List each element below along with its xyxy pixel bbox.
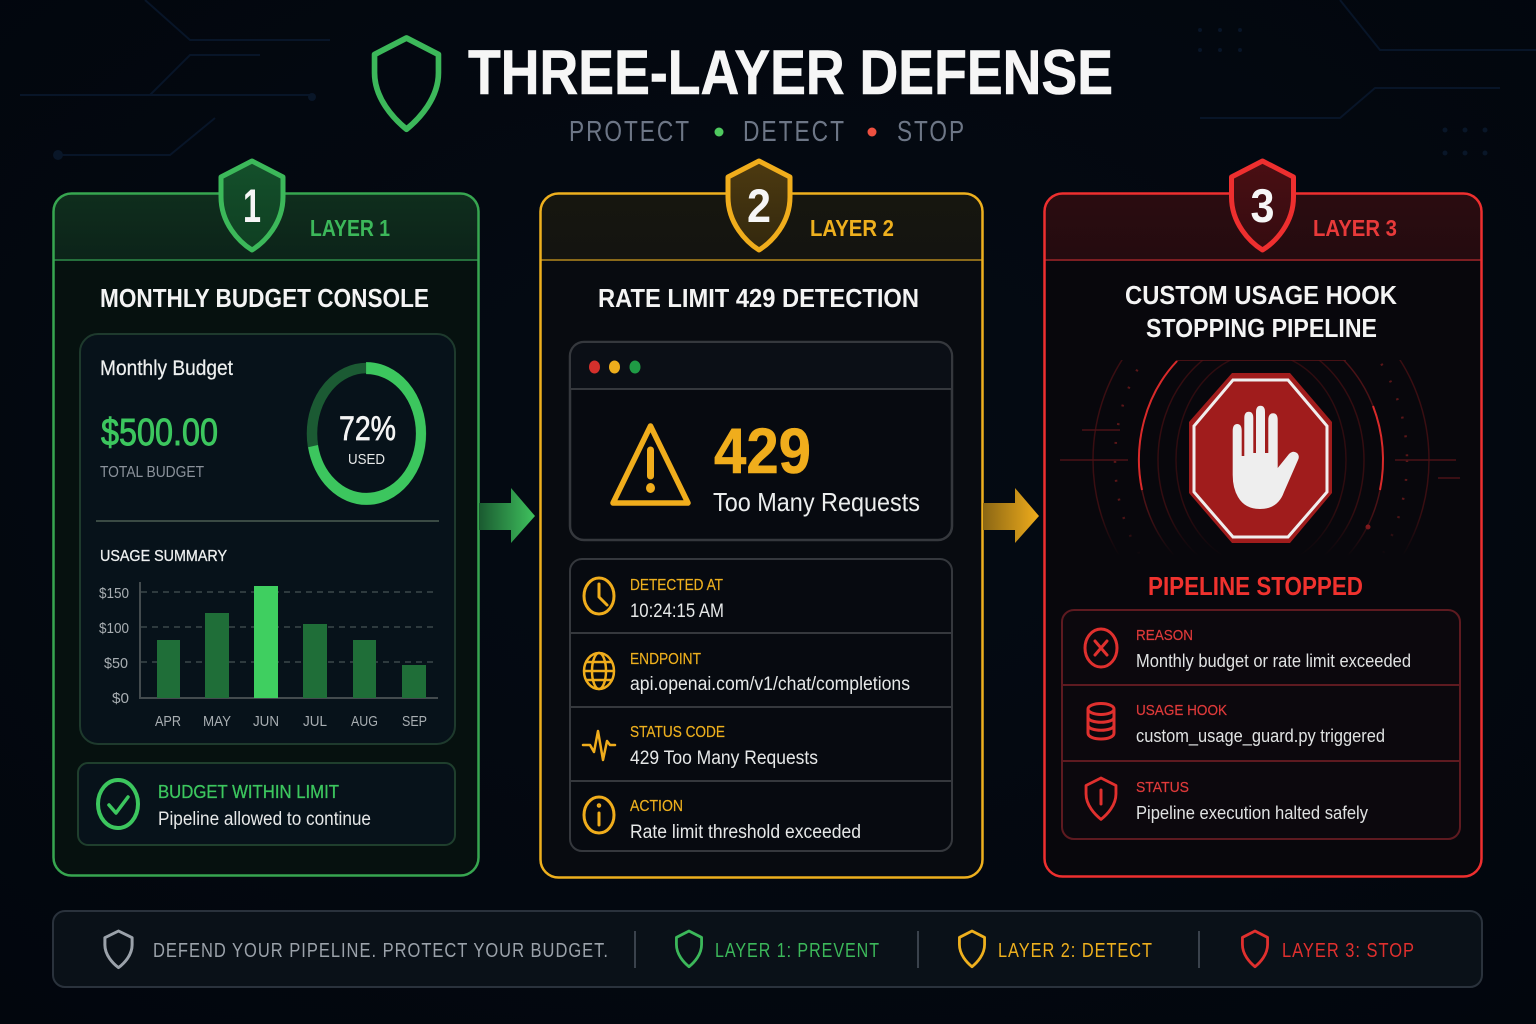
subtitle bbox=[569, 116, 966, 148]
row: usage hook: custom_usage_guard.py triggered bbox=[1136, 726, 1385, 747]
footer layer 3 stop: LAYER 3: STOP bbox=[1282, 940, 1415, 962]
footer layer 1 prevent bbox=[676, 931, 880, 967]
icon: badge shield 3: 3 bbox=[1250, 179, 1274, 232]
row: action bbox=[584, 797, 861, 843]
row: usage hook: USAGE HOOK bbox=[1136, 702, 1227, 719]
pipeline stopped label: PIPELINE STOPPED bbox=[1148, 571, 1363, 601]
error window card: Too Many Requests bbox=[713, 487, 920, 517]
row: status: STATUS bbox=[1136, 779, 1189, 796]
budget text bbox=[100, 357, 233, 481]
panel heading: MONTHLY BUDGET CONSOLE bbox=[100, 283, 429, 313]
bar chart: $150 bbox=[99, 585, 129, 602]
footer tagline: DEFEND YOUR PIPELINE. PROTECT YOUR BUDGET. bbox=[153, 940, 609, 962]
footer bar bbox=[53, 911, 1482, 987]
row: status bbox=[1086, 778, 1368, 823]
icon: badge shield 1 bbox=[221, 161, 283, 250]
budget text: Monthly Budget bbox=[100, 357, 233, 380]
status card: budget within limit: Pipeline allowed to continue bbox=[158, 809, 371, 830]
panel: layer 1 monthly budget console bbox=[54, 161, 478, 876]
row: usage hook bbox=[1088, 702, 1385, 747]
arrow: layer 2 to layer 3 bbox=[983, 488, 1039, 543]
budget text: $500.00 bbox=[101, 412, 218, 454]
status card: budget within limit bbox=[78, 763, 455, 845]
bar chart: MAY bbox=[203, 713, 231, 730]
row: reason: REASON bbox=[1136, 627, 1193, 644]
window dots bbox=[589, 360, 640, 374]
row: endpoint: ENDPOINT bbox=[630, 651, 701, 668]
title: THREE-LAYER DEFENSE bbox=[468, 38, 1113, 108]
panel heading: CUSTOM USAGE HOOK bbox=[1125, 280, 1397, 310]
layer 1 label: LAYER 1 bbox=[310, 215, 390, 241]
subtitle: PROTECT bbox=[569, 116, 691, 148]
layer 2 label: LAYER 2 bbox=[810, 215, 894, 241]
panel heading: STOPPING PIPELINE bbox=[1146, 313, 1377, 343]
error window card bbox=[570, 342, 952, 540]
donut chart 72% used bbox=[312, 368, 421, 499]
row: status code: 429 Too Many Requests bbox=[630, 748, 818, 769]
icon: badge shield 1: 1 bbox=[243, 179, 261, 232]
panel heading: RATE LIMIT 429 DETECTION bbox=[598, 283, 919, 313]
bar chart: $100 bbox=[99, 620, 129, 637]
arrow: layer 1 to layer 2 bbox=[479, 488, 535, 543]
row: status code bbox=[583, 724, 818, 769]
icon: title shield bbox=[375, 38, 438, 129]
bar chart: AUG bbox=[351, 713, 378, 730]
row: reason bbox=[1085, 627, 1411, 671]
icon: badge shield 3 bbox=[1232, 161, 1294, 250]
donut chart 72% used: 72% bbox=[339, 410, 396, 448]
radar rings bbox=[1060, 360, 1460, 550]
429 code: 429 bbox=[714, 415, 811, 487]
bar chart: JUL bbox=[303, 713, 327, 730]
row: reason: Monthly budget or rate limit exceeded bbox=[1136, 651, 1411, 671]
status card: budget within limit: BUDGET WITHIN LIMIT bbox=[158, 782, 339, 802]
row: detected at bbox=[584, 577, 724, 622]
icon: stop sign with hand bbox=[1189, 373, 1332, 543]
footer layer 2 detect bbox=[959, 931, 1153, 967]
bar chart bbox=[99, 582, 438, 730]
row: status: Pipeline execution halted safely bbox=[1136, 803, 1368, 823]
panel heading bbox=[1125, 280, 1397, 343]
budget text: TOTAL BUDGET bbox=[100, 464, 204, 481]
bar chart: SEP bbox=[402, 713, 427, 730]
row: action: ACTION bbox=[630, 798, 683, 815]
icon: check circle bbox=[98, 780, 138, 828]
detail rows card bbox=[1062, 610, 1460, 839]
detail rows card bbox=[570, 559, 952, 851]
panel: layer 2 rate limit detection bbox=[540, 161, 982, 878]
subtitle: DETECT bbox=[743, 116, 846, 148]
row: action: Rate limit threshold exceeded bbox=[630, 822, 861, 843]
bar chart: JUN bbox=[253, 713, 279, 730]
layer 3 label: LAYER 3 bbox=[1313, 215, 1397, 241]
donut chart 72% used: USED bbox=[348, 451, 385, 468]
panel: layer 3 custom usage hook bbox=[1044, 161, 1482, 876]
footer layer 1 prevent: LAYER 1: PREVENT bbox=[715, 940, 880, 962]
budget card bbox=[80, 334, 455, 744]
row: detected at: 10:24:15 AM bbox=[630, 601, 724, 622]
bar chart: $0 bbox=[112, 690, 129, 707]
footer tagline bbox=[105, 931, 609, 968]
bar chart: APR bbox=[155, 713, 181, 730]
icon: badge shield 2 bbox=[728, 161, 790, 250]
subtitle: STOP bbox=[897, 116, 966, 148]
row: status code: STATUS CODE bbox=[630, 724, 725, 741]
row: endpoint: api.openai.com/v1/chat/completions bbox=[630, 674, 910, 695]
title block bbox=[375, 38, 1113, 148]
footer layer 2 detect: LAYER 2: DETECT bbox=[998, 940, 1153, 962]
icon: badge shield 2: 2 bbox=[747, 179, 771, 232]
footer layer 3 stop bbox=[1242, 931, 1415, 967]
bar chart: $50 bbox=[104, 655, 128, 672]
row: detected at: DETECTED AT bbox=[630, 577, 723, 594]
usage summary heading: USAGE SUMMARY bbox=[100, 548, 227, 565]
icon: warning triangle bbox=[613, 426, 688, 503]
row: endpoint bbox=[584, 651, 910, 695]
